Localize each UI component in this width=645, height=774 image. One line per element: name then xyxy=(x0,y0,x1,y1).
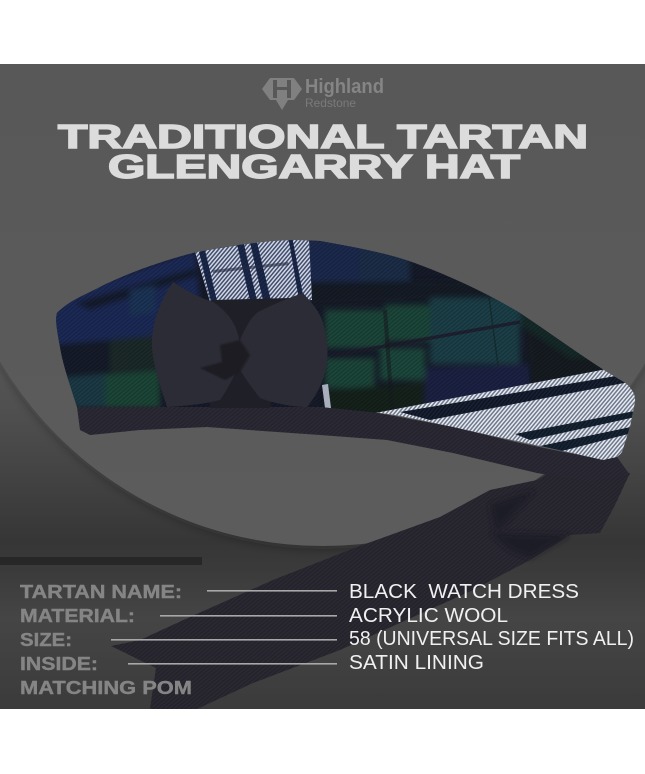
logo wordmark: Highland: Highland xyxy=(305,76,384,98)
accent bar xyxy=(0,557,202,565)
title line 1: TRADITIONAL TARTAN xyxy=(58,118,588,155)
leader line xyxy=(160,615,337,617)
tartan lower dark navy xyxy=(422,362,532,404)
leader line xyxy=(128,663,337,665)
tartan left dark band xyxy=(60,338,112,376)
logo: Highland Redstone xyxy=(262,76,384,110)
label: size: SIZE: xyxy=(20,630,72,650)
leader line xyxy=(207,590,337,592)
value: size 58: 58 (UNIVERSAL SIZE FITS ALL) xyxy=(349,628,634,650)
bow left wing xyxy=(152,282,240,407)
spec row: size xyxy=(20,628,634,650)
logo wordmark: Redstone: Redstone xyxy=(305,96,356,110)
tartan top right xyxy=(305,238,360,282)
hat band xyxy=(77,407,630,482)
tartan thin dark stripe xyxy=(330,322,520,356)
value: black watch dress: BLACK WATCH DRESS xyxy=(349,581,579,603)
white centre stripe panel xyxy=(195,240,312,302)
bow knot xyxy=(200,340,250,380)
spec row: material xyxy=(20,605,508,627)
value: satin lining: SATIN LINING xyxy=(349,652,484,674)
icon: diamond logo mark xyxy=(262,78,302,110)
spec row: tartan name xyxy=(20,581,579,603)
bow right wing xyxy=(238,293,328,407)
bow xyxy=(152,282,328,408)
leader line xyxy=(111,639,337,641)
bow centre backing xyxy=(210,298,290,408)
small white stripe near bow xyxy=(322,384,331,408)
tartan right dark wedge xyxy=(528,334,603,382)
label: inside: INSIDE: xyxy=(20,654,98,674)
title xyxy=(58,118,588,185)
hat crown tartan xyxy=(50,235,640,465)
label: matching pom: MATCHING POM xyxy=(20,678,192,698)
label: material: MATERIAL: xyxy=(20,606,135,626)
tartan green blocks xyxy=(325,310,385,348)
value: acrylic wool: ACRYLIC WOOL xyxy=(349,605,508,627)
hat tail ribbon xyxy=(111,470,630,709)
title line 2: GLENGARRY HAT xyxy=(108,148,520,185)
ribbon fold xyxy=(490,490,570,558)
tartan left green band xyxy=(102,368,162,407)
label: tartan name: TARTAN NAME: xyxy=(20,582,182,602)
white diagonal stripe band xyxy=(370,369,640,465)
spec row: inside xyxy=(20,652,484,674)
tartan left navy panel xyxy=(50,250,200,345)
